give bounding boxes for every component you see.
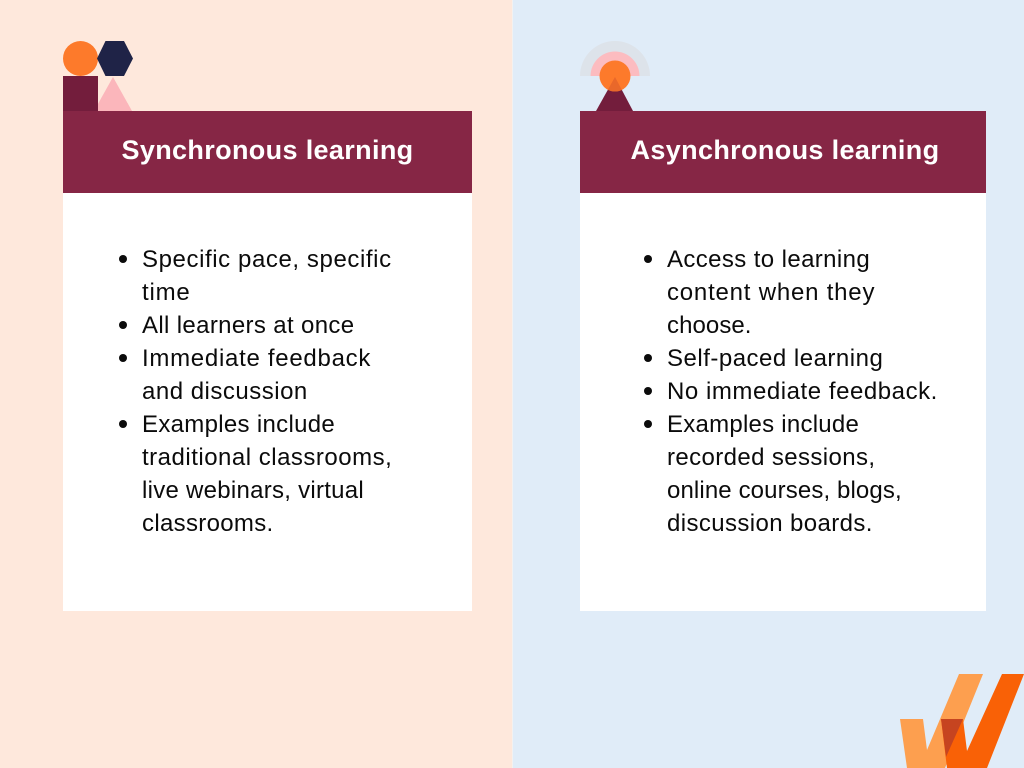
text block: asynchronous bullet list: content when they	[667, 279, 875, 306]
text block: synchronous bullet list: All learners at once	[142, 312, 354, 339]
text block: asynchronous bullet list: Self-paced learning	[667, 345, 883, 372]
text block: synchronous bullet list: Immediate feedback	[142, 345, 371, 372]
icon: brand logo	[900, 674, 1024, 768]
text block: synchronous bullet list: time	[142, 279, 191, 306]
icon: geometric shapes left	[63, 41, 133, 111]
text block: synchronous bullet list: traditional classrooms,	[142, 444, 392, 471]
heading: synchronous learning	[63, 111, 472, 193]
text block: asynchronous bullet list: online courses, blogs,	[667, 477, 902, 504]
heading: asynchronous learning	[580, 111, 986, 193]
panel: left background	[0, 0, 512, 768]
text block: synchronous bullet list: classrooms.	[142, 510, 274, 537]
text block: asynchronous bullet list: No immediate feedback.	[667, 378, 938, 405]
text block: synchronous bullet list: Examples include	[142, 411, 335, 438]
icon: geometric shapes right	[580, 41, 650, 111]
text block: asynchronous bullet list: recorded sessions,	[667, 444, 875, 471]
panel: right background	[513, 0, 1024, 768]
text block: asynchronous bullet list: discussion boards.	[667, 510, 873, 537]
panel: synchronous learning card	[63, 111, 472, 611]
text block: asynchronous bullet list: Access to learning	[667, 246, 870, 273]
text block: synchronous bullet list	[119, 246, 392, 537]
text block: asynchronous bullet list	[644, 246, 938, 537]
text block: asynchronous bullet list: Examples include	[667, 411, 859, 438]
text block: synchronous bullet list: Specific pace, specific	[142, 246, 392, 273]
panel: asynchronous learning card	[580, 111, 986, 611]
text block: asynchronous bullet list: choose.	[667, 312, 752, 339]
text block: synchronous bullet list: and discussion	[142, 378, 308, 405]
heading: synchronous learning: Synchronous learning	[121, 135, 414, 165]
heading: asynchronous learning: Asynchronous learning	[631, 135, 939, 165]
text block: synchronous bullet list: live webinars, virtual	[142, 477, 364, 504]
